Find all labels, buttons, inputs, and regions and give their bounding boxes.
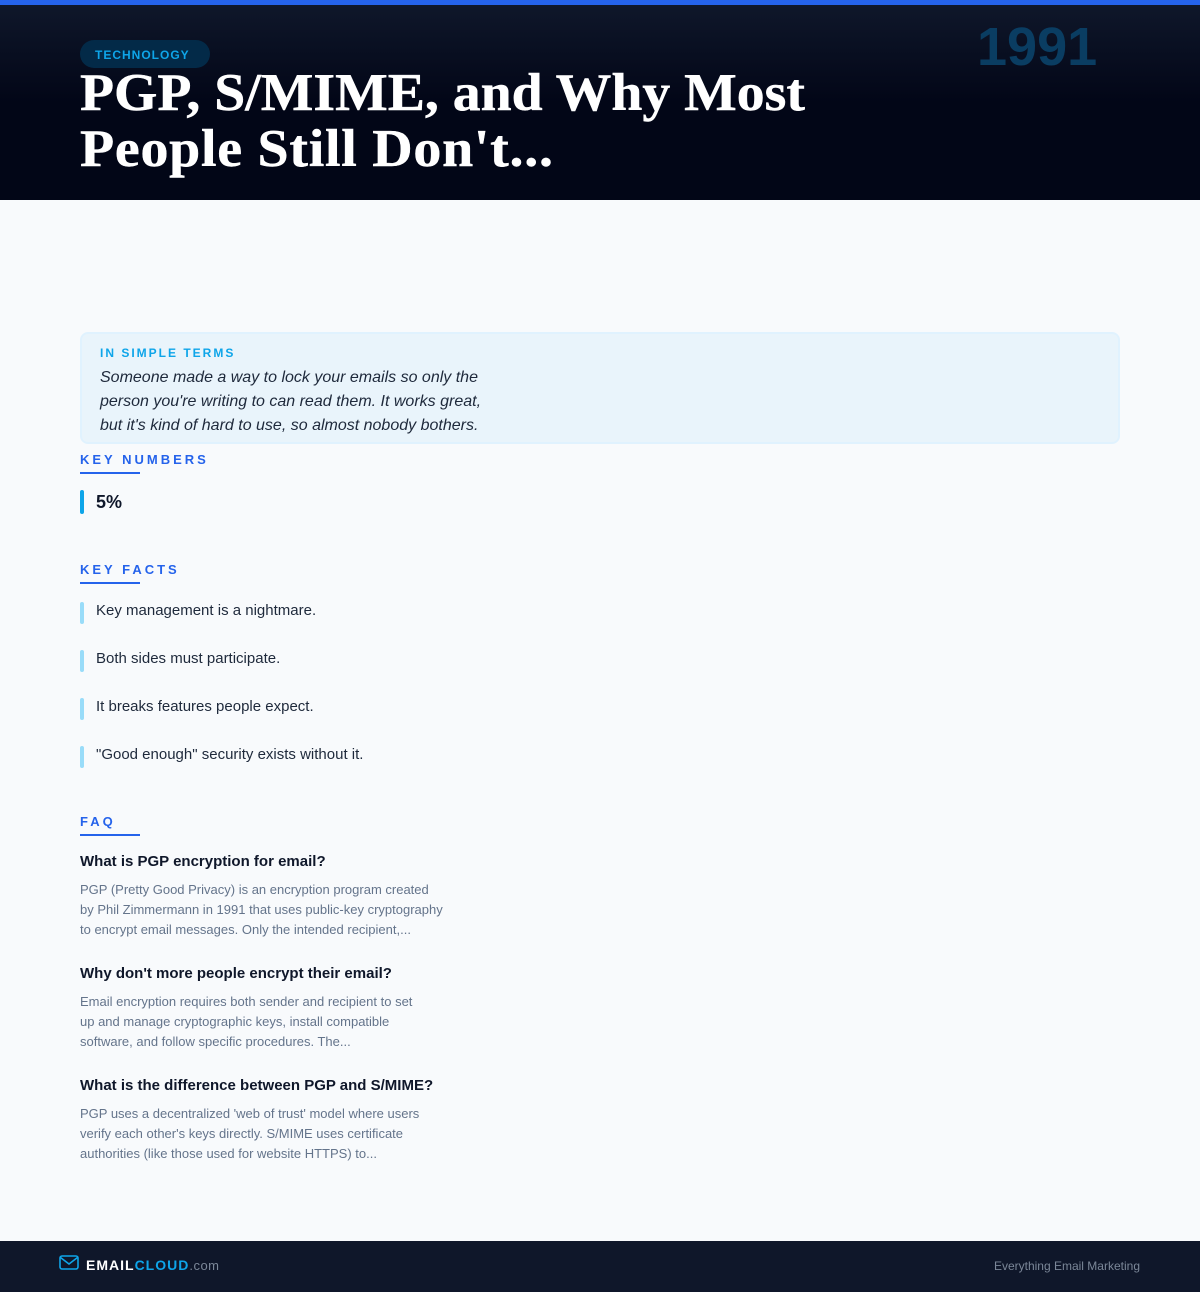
footer tagline: Everything Email Marketing: [994, 1259, 1140, 1273]
category pill: TECHNOLOGY: [95, 48, 190, 62]
faq 2: Why don't more people encrypt their email?: [80, 965, 392, 982]
faq 2: [80, 965, 412, 1049]
callout text: Someone made a way to lock your emails so only the: [100, 369, 478, 386]
heading: key facts: KEY FACTS: [80, 562, 180, 577]
faq 3: authorities (like those used for website HTTPS) to...: [80, 1146, 377, 1161]
icon: envelope: [59, 1255, 79, 1270]
callout text: [100, 369, 481, 434]
callout label: IN SIMPLE TERMS: [100, 346, 235, 360]
stat: 5%: [80, 490, 122, 514]
panel: in simple terms: [80, 332, 1120, 444]
year watermark: 1991: [977, 17, 1097, 77]
faq 1: What is PGP encryption for email?: [80, 853, 326, 870]
fact 2: Both sides must participate.: [96, 650, 280, 667]
faq 2: Email encryption requires both sender and recipient to set: [80, 994, 412, 1009]
fact 1: Key management is a nightmare.: [96, 602, 316, 619]
stat: 5%: 5%: [96, 492, 122, 512]
faq 1: to encrypt email messages. Only the intended recipient,...: [80, 922, 411, 937]
faq 3: verify each other's keys directly. S/MIME uses certificate: [80, 1126, 403, 1141]
faq 1: [80, 853, 443, 937]
faq 3: What is the difference between PGP and S/MIME?: [80, 1077, 433, 1094]
faq 2: software, and follow specific procedures. The...: [80, 1034, 351, 1049]
faq 1: PGP (Pretty Good Privacy) is an encryption program created: [80, 882, 429, 897]
faq 3: [80, 1077, 433, 1161]
footer brand: EMAILCLOUD.com: [86, 1257, 220, 1273]
fact 4: "Good enough" security exists without it.: [96, 746, 363, 763]
category pill: [80, 40, 210, 68]
fact 3: It breaks features people expect.: [96, 698, 314, 715]
footer: [0, 1241, 1200, 1292]
faq 2: up and manage cryptographic keys, install compatible: [80, 1014, 389, 1029]
header band: [0, 0, 1200, 200]
title: [80, 64, 805, 178]
title: People Still Don't...: [80, 120, 554, 178]
heading: faq: FAQ: [80, 814, 116, 829]
title: PGP, S/MIME, and Why Most: [80, 64, 805, 122]
callout text: but it's kind of hard to use, so almost nobody bothers.: [100, 417, 478, 434]
heading: key numbers: KEY NUMBERS: [80, 452, 209, 467]
callout text: person you're writing to can read them. It works great,: [100, 393, 481, 410]
faq 3: PGP uses a decentralized 'web of trust' model where users: [80, 1106, 419, 1121]
faq 1: by Phil Zimmermann in 1991 that uses public-key cryptography: [80, 902, 443, 917]
